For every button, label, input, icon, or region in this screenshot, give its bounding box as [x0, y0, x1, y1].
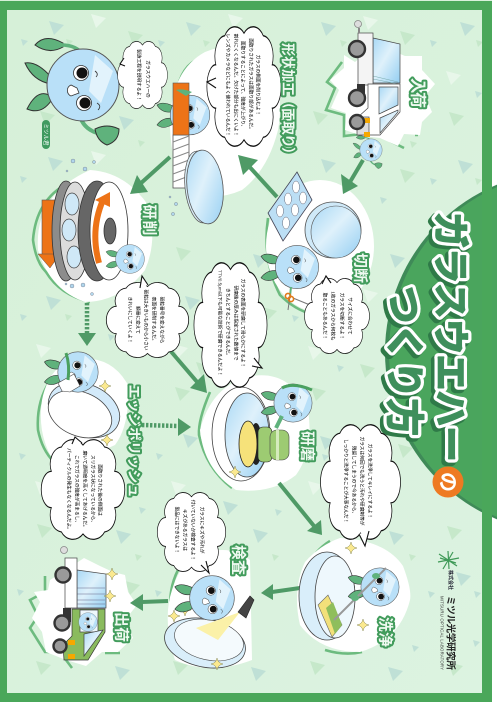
icon: mascot with cloth [44, 352, 98, 392]
bubble: 洗浄: ガラスは何回でも洗うと汚れや研磨剤等が [358, 437, 365, 526]
icon: mascot on 入荷 [353, 136, 382, 169]
title: ガラスウエハーのつくり方 [379, 212, 471, 498]
bubble: 検査: 付いていないか検査するよ！ [189, 500, 196, 560]
bubble: 研削: 順番に変えて [134, 306, 141, 334]
arrow: 洗浄 to 検査 [261, 584, 300, 600]
panel: 洗浄 blob [297, 538, 410, 654]
bubble: 形状加工: 割れにくくなるんだ。欠けた部分も出にくいよ！ [232, 34, 239, 136]
bubble: 研磨: 研磨後の厚みは指定された数値まで [232, 285, 239, 361]
label: ミツル君: ミツル君 [42, 123, 49, 146]
bubble: 形状加工: レンズやカメラなどにもよく使われているんだ！ [224, 34, 231, 136]
bubble: introduction [118, 41, 167, 109]
icon: shipping truck [54, 546, 118, 660]
bubble: 研磨 [194, 263, 267, 387]
heading: 入荷: 入荷 [408, 78, 426, 108]
icon: mascot inspecting [175, 576, 234, 620]
icon: polisher tool [229, 421, 289, 478]
title: ガラスウエハーのつくり方: つくり方 [379, 289, 421, 439]
bubble: 研削: 砥粒は大きいものから小さい [142, 290, 149, 351]
icon: mascot washing [334, 568, 399, 620]
bubble: エッジポリッシュ [41, 437, 125, 539]
bubble: 検査 [157, 493, 226, 573]
icon: mascot at grinding [106, 245, 144, 273]
bubble: introduction: 製造工程を説明するよ！ [135, 49, 142, 101]
panel: 入荷 burst [326, 51, 435, 148]
heading: 切断: 切断 [352, 253, 368, 283]
panel: 検査 blob [168, 550, 252, 668]
icon: mascot large introduction [25, 38, 119, 145]
bubble: 切断: 1枚のガラスから何枚も [329, 291, 336, 341]
bubble: 研削: 表面を研削するんだ。 [150, 297, 157, 343]
panel: エッジポリッシュ blob [38, 358, 128, 470]
bubble: エッジポリッシュ: スリガラス状になっているから、 [89, 455, 96, 525]
icon: cleaning glass disc [299, 542, 369, 640]
title: ガラスウエハーのつくり方: つくり方 [382, 286, 424, 436]
logo: company mark and name [438, 551, 459, 670]
arrow: 検査 to 出荷 [130, 594, 168, 611]
panel: 形状加工 blob [170, 47, 280, 197]
heading: 研削: 研削 [140, 204, 158, 236]
heading: 出荷: 出荷 [112, 612, 130, 642]
bubble: 研磨: きちんとすることができるんだ。 [224, 288, 231, 358]
icon: glass tray [268, 172, 312, 241]
bubble: 洗浄: ガラスを洗浄してキレイにするよ！ [366, 444, 373, 518]
icon: mascot with chamfer tool [157, 83, 210, 188]
title: ガラスウエハーのつくり方: つくり方 [382, 286, 424, 436]
arrow: 形状加工 to 研削 [130, 157, 170, 194]
bubble: 形状加工: ガラスの側面を削り込むよ！ [254, 55, 261, 115]
logo: company mark and name: ミツル光学研究所 [444, 596, 456, 670]
heading: 研磨: 研磨 [298, 431, 316, 461]
bubble: 切断: ガラスを切断するよ！ [338, 293, 345, 339]
bubble: 形状加工: 面取りされたガラスは面取り部があるんだ。 [247, 38, 254, 132]
icon: polishing disc [212, 387, 270, 481]
logo: company mark and name: 株式会社 [447, 570, 454, 590]
panel: 出荷 burst [30, 558, 137, 668]
bubble: 洗浄: 残留してしまうので今あるから、 [350, 446, 357, 516]
arrow: 研磨 to 洗浄 [279, 483, 322, 535]
icon: chamfered disc [169, 148, 227, 226]
title: ガラスウエハーのつくり方: ガラスウエハー [427, 215, 468, 465]
bubble: 洗浄 [320, 425, 401, 546]
bubble: introduction: ガラスウエハーの [144, 60, 151, 98]
bubble: エッジポリッシュ: これでガラスの強度が高まるし、 [73, 455, 80, 525]
bubble: エッジポリッシュ: 磨いて透明度を高くしてあげるんだ。 [81, 450, 88, 530]
heading: 検査: 検査 [230, 545, 246, 575]
bubble: エッジポリッシュ: 面取りされた後の側面は [96, 464, 103, 516]
bubble: 検査: ガラスにキズや汚れが [198, 507, 205, 554]
bubble: 切断 [305, 276, 369, 354]
panel: 研磨 blob [199, 375, 310, 491]
bubble: 検査: 製品にはできないよ！ [173, 507, 180, 553]
icon: mascot with scissors [261, 245, 319, 310]
panel: 研削 blob [33, 170, 152, 302]
arrow: 研削 to エッジポリッシュ (dotted) [78, 303, 96, 346]
heading: 形状加工（面取り）: 形状加工（面取り） [280, 43, 296, 161]
title: ガラスウエハーのつくり方: ガラスウエハー [430, 212, 471, 462]
icon: grinding machine [38, 159, 128, 296]
logo: company mark and name: MITSURU OPTICAL LABORATORY [440, 596, 444, 670]
bubble: 洗浄: しっかりと洗浄することが大事なんだ！ [342, 439, 349, 523]
bubble: 研磨: ガラスの表面を研磨して滑らかにするよ！ [239, 279, 246, 367]
arrow: 入荷 to 切断 [341, 160, 363, 194]
icon: mascot with polisher [261, 384, 312, 428]
bubble: 切断: 取ることもあるんだ！ [321, 293, 328, 339]
heading: 洗浄: 洗浄 [376, 617, 394, 647]
bubble: 研削 [106, 276, 189, 358]
title: ガラスウエハーのつくり方: ガラスウエハー [430, 212, 471, 462]
bubble: 形状加工 [207, 27, 281, 146]
label: ミツル君 [42, 120, 50, 149]
title arc panel [385, 171, 497, 533]
bubble: 研削: きれいにしていくよ！ [126, 297, 133, 343]
heading: エッジポリッシュ: エッジポリッシュ [126, 384, 142, 498]
bubble: 切断: サイズに合わせて [346, 297, 353, 335]
title: ガラスウエハーのつくり方: の [436, 472, 458, 492]
panel: 切断 blob [266, 180, 374, 314]
icon: incoming truck [349, 20, 400, 137]
arrow: 研削 to 研磨 [168, 348, 207, 393]
icon: inspection glass with lamp [160, 596, 254, 675]
icon: edge polish disc [40, 372, 128, 448]
arrow: エッジポリッシュ to 研磨 (dotted) [142, 418, 191, 436]
bubble: エッジポリッシュ: パーティクルの発生もなくなるんだよ。 [65, 448, 72, 532]
bubble: 形状加工: 面取りすることによって、強度が上がり、 [239, 41, 246, 129]
bubble: 研磨: TTV0.5μm以下も可能な技術で研磨できるんだよ！ [216, 270, 223, 376]
bubble: 検査: キズがあるガラスは [181, 509, 188, 551]
icon: cut round glass [305, 202, 361, 258]
bubble: 研削: 砥粒番号を変えながら [158, 297, 165, 344]
arrow: 切断 to 形状加工 [238, 155, 277, 197]
